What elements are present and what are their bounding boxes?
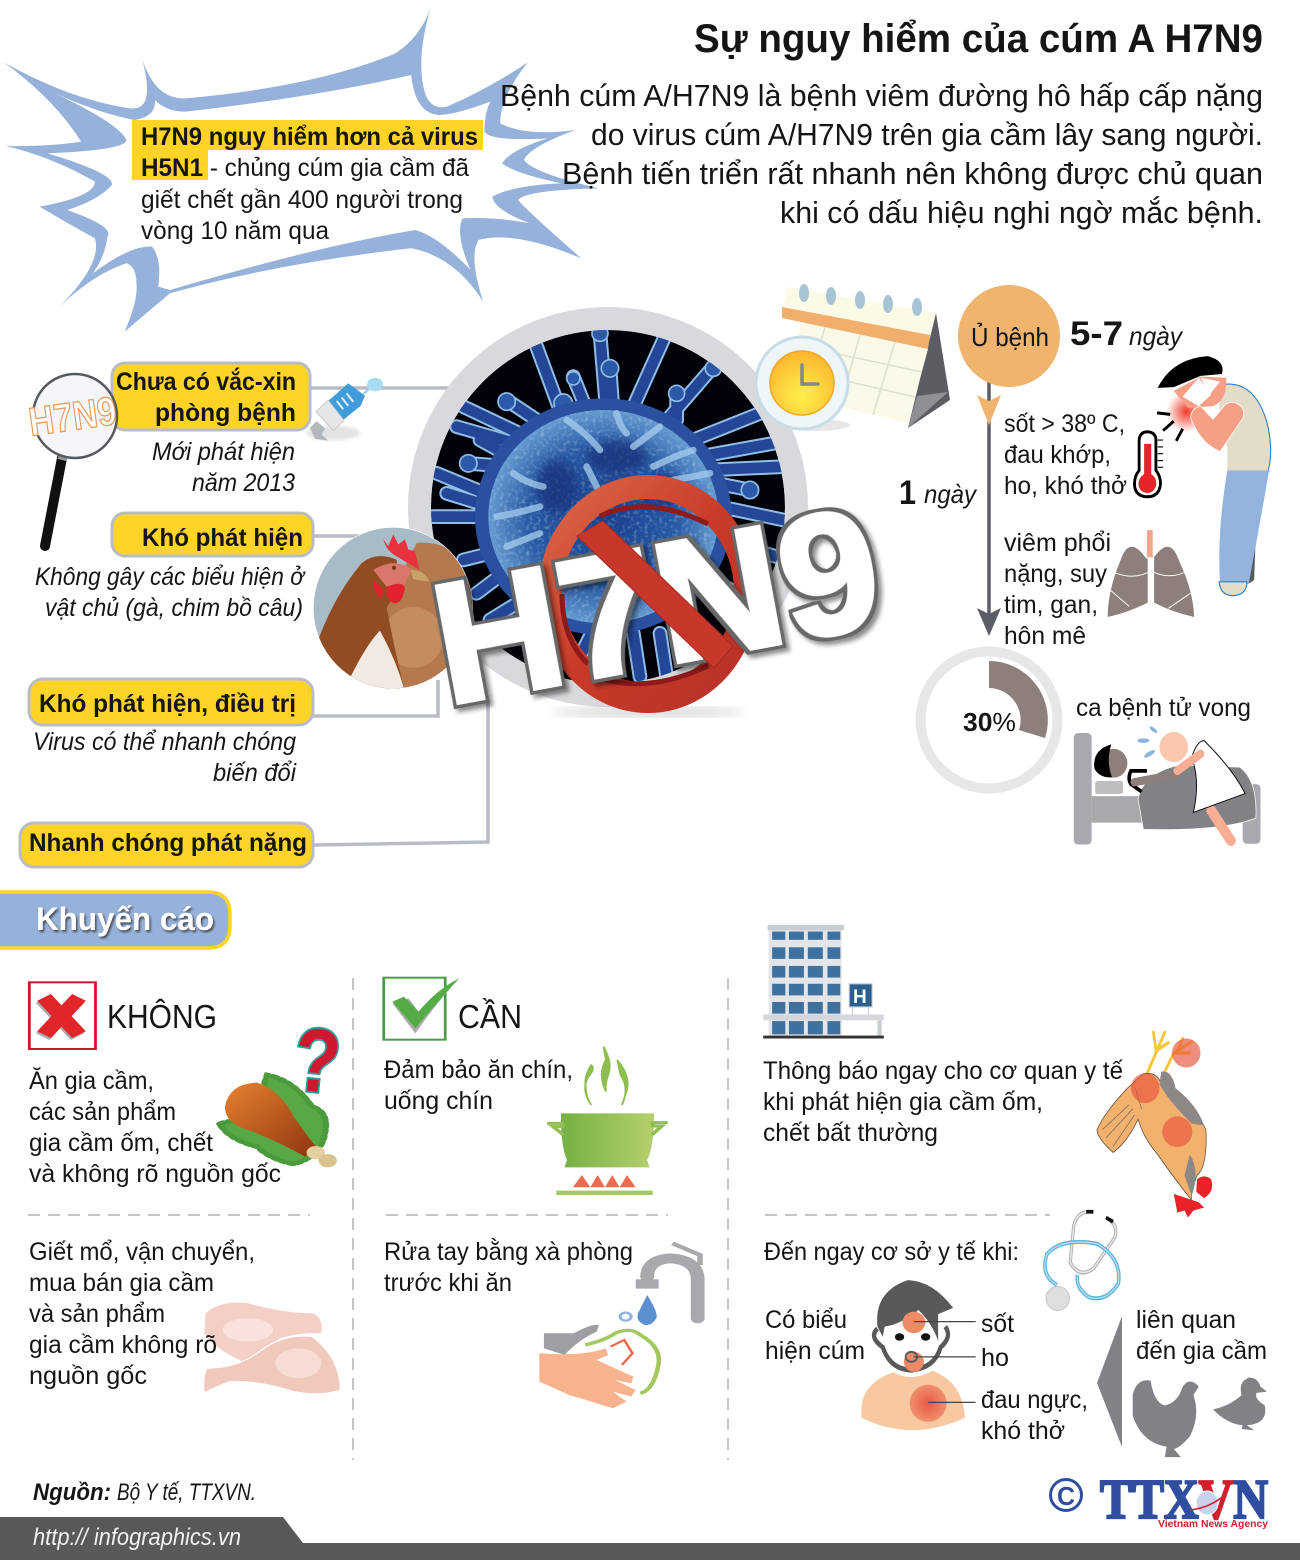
note: discovered 2013: Mới phát hiện <box>152 438 295 466</box>
text: wash hands: trước khi ăn <box>384 1269 512 1297</box>
symptoms text: ho, khó thở <box>1004 472 1127 500</box>
icon: calendar and clock <box>756 284 950 431</box>
text: notify: khi phát hiện gia cầm ốm, <box>763 1088 1043 1116</box>
H7N9 big letters: H7N9 <box>419 471 894 741</box>
icon: drumstick <box>219 1075 337 1167</box>
labels: symptoms: đau ngực, <box>981 1386 1088 1414</box>
icon: hospital <box>763 925 884 1038</box>
text: do not trade: và sản phẩm <box>29 1300 165 1328</box>
text: do not trade: mua bán gia cầm <box>29 1269 214 1297</box>
text: flu symptoms <box>765 1306 865 1365</box>
number: 1 day: 1 <box>899 474 916 512</box>
labels: symptoms <box>981 1310 1088 1445</box>
icon: magnifier <box>26 374 119 546</box>
pill: hard to detect <box>112 513 313 556</box>
callout text: H5N1 - chủng cúm gia cầm đã <box>141 154 469 182</box>
dividers <box>28 978 1050 1460</box>
icon: hen and duck <box>1133 1378 1267 1457</box>
note: host symptoms: Không gây các biểu hiện ở <box>35 563 306 591</box>
text: cook well <box>384 1056 573 1115</box>
icon: question mark: ? <box>289 1009 345 1114</box>
severe symptoms text <box>1004 529 1111 650</box>
note: discovered 2013 <box>152 438 295 497</box>
text: cook well: Đảm bảo ăn chín, <box>384 1056 573 1084</box>
symptoms text <box>1004 410 1127 500</box>
chart: 30% mortality <box>920 652 1058 788</box>
timeline <box>958 285 1060 636</box>
icon: raw chicken <box>203 1303 341 1394</box>
text: poultry related: liên quan <box>1136 1306 1236 1334</box>
icon: stethoscope <box>1045 1212 1119 1310</box>
number: 5-7 days <box>1070 315 1184 353</box>
hospital sign letter: H <box>853 987 867 1008</box>
text: do not eat: Ăn gia cầm, <box>29 1066 154 1095</box>
pill: hard to treat <box>29 679 313 725</box>
icon: sick rooster <box>1097 1032 1212 1218</box>
source <box>33 1479 256 1506</box>
virus graphic <box>408 307 808 707</box>
logo: TTXVN: Vietnam News Agency <box>1158 1518 1268 1530</box>
intro text: Bệnh cúm A/H7N9 là bệnh viêm đường hô hấp cấp nặng <box>500 78 1263 113</box>
severe symptoms text: nặng, suy <box>1004 560 1107 588</box>
number: 1 day <box>899 474 978 512</box>
heading: recommendations: Khuyến cáo <box>36 901 214 937</box>
icon: face with symptoms <box>861 1280 976 1430</box>
source: Bộ Y tế, TTXVN. <box>117 1479 256 1506</box>
note: virus mutates: Virus có thể nhanh chóng <box>33 728 296 756</box>
labels: symptoms: ho <box>981 1344 1009 1372</box>
icon: lungs <box>1108 530 1194 617</box>
connector lines <box>310 388 488 845</box>
photo: hen <box>310 526 477 692</box>
text: do not eat: gia cầm ốm, chết <box>29 1129 213 1157</box>
pill: hard to detect: Khó phát hiện <box>142 524 303 552</box>
icon: syringe <box>307 378 383 441</box>
icon: coughing man <box>1157 356 1271 596</box>
icon: check box <box>384 978 459 1040</box>
source: Nguồn: <box>33 1479 111 1506</box>
label: can: CẦN <box>458 998 522 1035</box>
logo: TTXVN: TTXVN <box>1100 1469 1268 1531</box>
pill: quickly severe: Nhanh chóng phát nặng <box>29 829 307 857</box>
number: 5-7 days: 5-7 <box>1070 315 1123 353</box>
text: poultry related: đến gia cầm <box>1136 1337 1267 1365</box>
symptoms text: đau khớp, <box>1004 441 1111 469</box>
panel: burst callout <box>4 7 599 332</box>
grey ring <box>408 307 808 707</box>
burst shape <box>4 7 599 332</box>
icon: red x <box>29 982 95 1049</box>
severe symptoms text: viêm phổi <box>1004 529 1111 557</box>
text: wash hands <box>384 1237 633 1297</box>
callout text: vòng 10 năm qua <box>141 217 329 245</box>
icon: magnifier: H7N9 <box>26 389 119 445</box>
note: virus mutates <box>33 728 297 787</box>
label: deaths: ca bệnh tử vong <box>1076 694 1251 722</box>
note: discovered 2013: năm 2013 <box>192 469 295 497</box>
highlight <box>132 120 483 180</box>
text: notify: chết bất thường <box>763 1119 938 1147</box>
note: host symptoms: vật chủ (gà, chim bồ câu) <box>45 594 303 622</box>
no sign ring <box>538 475 758 717</box>
intro text: khi có dấu hiệu nghi ngờ mắc bệnh. <box>780 195 1263 230</box>
intro text: Bệnh tiến triển rất nhanh nên không được chủ quan <box>562 156 1263 191</box>
column: do not <box>29 982 345 1394</box>
label: incubation: Ủ bệnh <box>971 321 1049 352</box>
no sign slash <box>577 521 733 668</box>
number: 1 day: ngày <box>924 479 978 509</box>
pill: no vaccine: Chưa có vắc-xin <box>116 366 296 396</box>
text: do not eat <box>29 1066 281 1188</box>
text: wash hands: Rửa tay bằng xà phòng <box>384 1237 633 1266</box>
text: poultry related <box>1136 1306 1267 1365</box>
callout text: giết chết gần 400 người trong <box>141 186 463 214</box>
column: do <box>384 978 700 1408</box>
intro text: do virus cúm A/H7N9 trên gia cầm lây sang người. <box>591 117 1263 152</box>
callout text: H7N9 nguy hiểm hơn cả virus <box>141 123 478 151</box>
icon: thermometer <box>1134 432 1163 497</box>
labels: symptoms: sốt <box>981 1310 1014 1338</box>
text: do not trade <box>29 1238 255 1390</box>
text: do not eat: các sản phẩm <box>29 1098 176 1126</box>
symptoms text: sốt > 38º C, <box>1004 410 1125 438</box>
labels: symptoms: khó thở <box>981 1417 1065 1445</box>
text: do not trade: Giết mổ, vận chuyển, <box>29 1238 255 1266</box>
text: flu symptoms: hiện cúm <box>765 1337 865 1365</box>
pill: hard to treat: Khó phát hiện, điều trị <box>39 690 296 718</box>
pill: quickly severe <box>20 823 313 867</box>
intro text <box>500 78 1263 230</box>
chart: 30% mortality: 30% <box>963 707 1016 737</box>
note: virus mutates: biến đổi <box>213 759 297 787</box>
heading: recommendations <box>0 892 230 948</box>
text: go to clinic: Đến ngay cơ sở y tế khi: <box>764 1238 1019 1266</box>
footer bar <box>0 1517 1300 1560</box>
virus image <box>431 325 785 684</box>
text: do not trade: nguồn gốc <box>29 1362 147 1390</box>
icon: cooking pot <box>547 1047 668 1195</box>
incubation circle <box>958 285 1060 387</box>
icon: patient in bed <box>1074 725 1261 845</box>
logo: TTXVN: C <box>1057 1481 1075 1511</box>
pill: no vaccine <box>112 363 310 430</box>
text: flu symptoms: Có biểu <box>765 1306 847 1334</box>
severe symptoms text: hôn mê <box>1004 622 1086 650</box>
pill: no vaccine: phòng bệnh <box>155 399 296 427</box>
column: report <box>763 925 1267 1457</box>
severe symptoms text: tim, gan, <box>1004 591 1098 619</box>
note: host symptoms <box>35 563 306 622</box>
footer bar: http:// infographics.vn <box>33 1524 241 1551</box>
number: 5-7 days: ngày <box>1129 321 1184 351</box>
icon: grey arrowhead <box>1097 1316 1122 1447</box>
text: do not trade: gia cầm không rõ <box>29 1331 217 1359</box>
text: notify <box>763 1057 1123 1147</box>
text: notify: Thông báo ngay cho cơ quan y tế <box>763 1057 1123 1085</box>
text: cook well: uống chín <box>384 1087 493 1115</box>
callout text <box>141 123 478 245</box>
icon: washing hands <box>539 1243 700 1408</box>
text: do not eat: và không rõ nguồn gốc <box>29 1160 281 1188</box>
title: Sự nguy hiểm của cúm A H7N9 <box>694 17 1263 61</box>
label: khong: KHÔNG <box>107 998 217 1035</box>
